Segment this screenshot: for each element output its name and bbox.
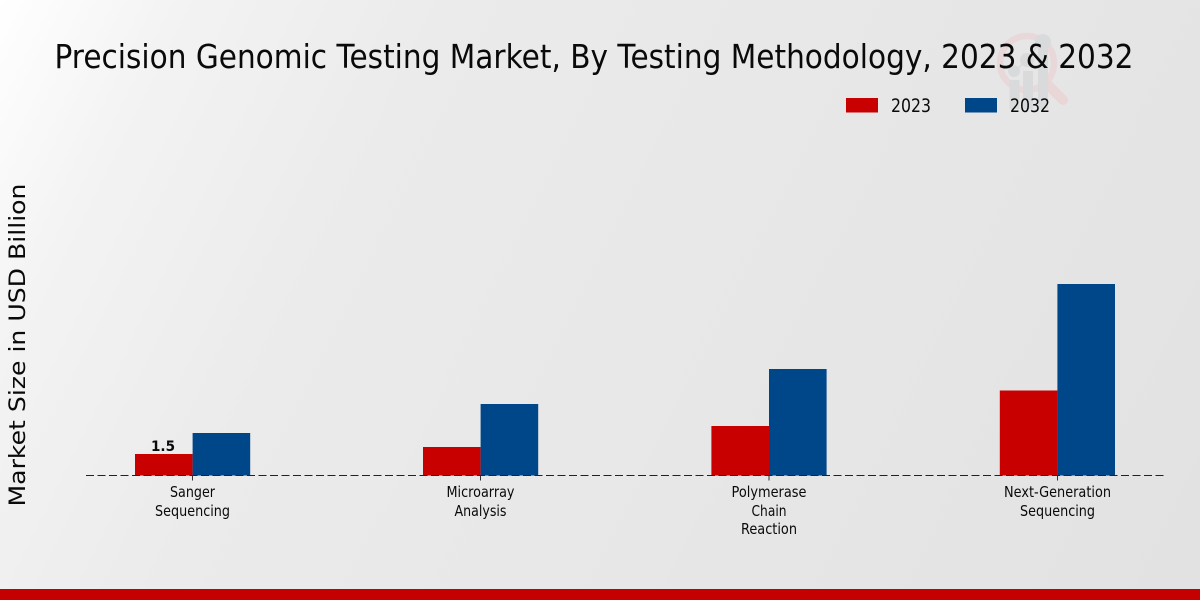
x label: Next-Generation Sequencing: Next-Generation: [1004, 483, 1111, 501]
x label: Polymerase Chain Reaction: Polymerase: [732, 483, 806, 501]
x label: Microarray Analysis: [446, 483, 514, 520]
bottom red band: [0, 589, 1200, 600]
x label: Polymerase Chain Reaction: Chain: [752, 502, 786, 520]
x label: Polymerase Chain Reaction: Reaction: [741, 520, 797, 538]
legend: 2023: 2023: [891, 95, 931, 117]
legend: 2023: [846, 95, 931, 117]
x label: Microarray Analysis: Analysis: [454, 502, 506, 520]
bars: Next-Generation Sequencing: [1000, 284, 1115, 476]
legend: [846, 95, 1050, 117]
data label: 1.5: 1.5: [151, 439, 175, 455]
watermark logo: [1000, 34, 1063, 109]
x label: Next-Generation Sequencing: Sequencing: [1020, 502, 1095, 520]
bars: Sanger Sequencing: [135, 433, 250, 476]
y axis label: Market Size in USD Billion: [5, 184, 31, 506]
x label: Sanger Sequencing: [155, 483, 230, 520]
x label: Sanger Sequencing: Sequencing: [155, 502, 230, 520]
bars: Polymerase Chain Reaction: [711, 369, 827, 476]
bar chart: [86, 284, 1164, 538]
x label: Microarray Analysis: Microarray: [446, 483, 514, 501]
legend: 2032: [965, 95, 1050, 117]
x axis baseline: [86, 476, 1164, 480]
bars: Microarray Analysis: [423, 404, 538, 476]
x label: Next-Generation Sequencing: [1004, 483, 1111, 520]
x label: Sanger Sequencing: Sanger: [170, 483, 216, 501]
x label: Polymerase Chain Reaction: [732, 483, 806, 538]
legend: 2032: 2032: [1010, 95, 1050, 117]
